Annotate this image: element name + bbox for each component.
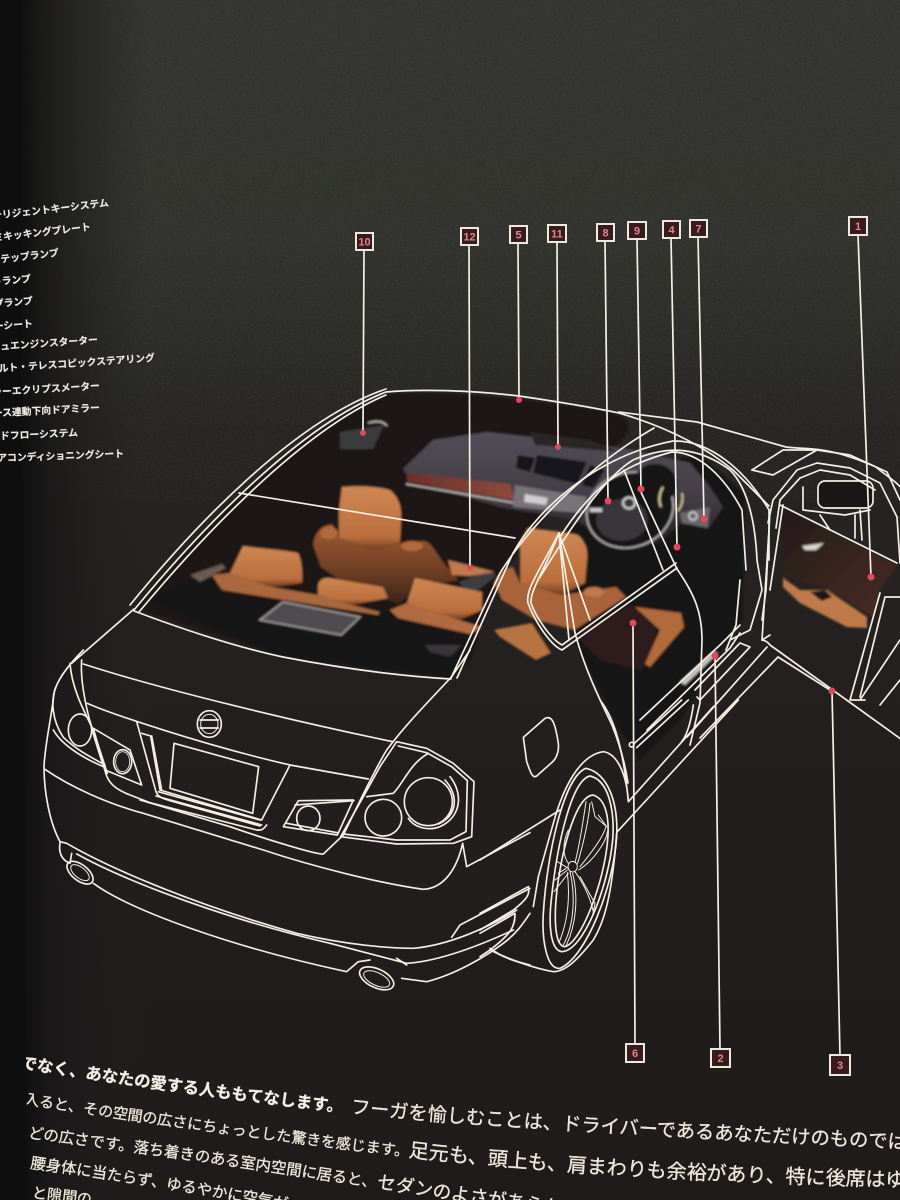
body copy: でなく、あなたの愛する人ももてなします。 フーガを愉しむことは、ドライバーであるあなただけのものでは: [26, 1057, 900, 1149]
body door dark area: [560, 455, 745, 760]
leader line 8: [604, 241, 612, 504]
lower body: [45, 769, 530, 889]
trunk lamp: [283, 800, 353, 835]
label 12: [461, 228, 478, 245]
door mirror outer: [803, 487, 870, 515]
label 10: [356, 233, 373, 250]
door handle: [802, 543, 824, 550]
label 11: 11: [551, 228, 563, 240]
label 3: 3: [837, 1060, 843, 1072]
leader line 1: [858, 235, 874, 580]
front right roof: [619, 412, 900, 492]
door panel: [780, 505, 897, 617]
front seat cushion: [494, 623, 551, 660]
leader line 2: [712, 652, 720, 1049]
door waist: [780, 505, 897, 563]
rear armrest centre: [318, 578, 388, 605]
steering wheel: [576, 460, 684, 560]
front headrest: [520, 528, 587, 595]
label 9: [628, 222, 646, 239]
front lower: [490, 833, 617, 972]
leader line 5: [516, 243, 522, 403]
rear headrest right: [407, 578, 482, 620]
rearview mirror: [340, 425, 384, 449]
centre shoulder belts: [459, 570, 496, 596]
sills: [617, 700, 738, 832]
A pillar door opening: [730, 530, 770, 640]
bumper: [60, 842, 517, 948]
instrument cluster: [633, 464, 677, 504]
left inner lamp: [93, 728, 142, 785]
leader line 6: [630, 620, 636, 1044]
car line drawing: roof and pillars: [72, 389, 900, 783]
door lower frame: [850, 593, 900, 700]
sill plate: [680, 652, 718, 685]
leader line 3: [828, 688, 840, 1056]
label 8: 8: [602, 228, 609, 240]
dashboard: [403, 432, 723, 548]
lid bottom: [105, 770, 267, 830]
door mirror glass: [818, 481, 873, 508]
rear glass dark area: [137, 393, 629, 678]
label 5: [510, 226, 527, 243]
roof line: [134, 390, 769, 610]
plate recess: [156, 792, 262, 825]
label 4: [663, 221, 680, 238]
quarter window: [528, 533, 677, 650]
far-side seat back: [313, 525, 459, 604]
C pillar into windshield arcs: [451, 428, 654, 678]
right tail lamp: [341, 742, 474, 844]
label 1: [849, 217, 867, 235]
front seat back: [494, 567, 626, 630]
front seat footwell dark red: [575, 605, 660, 670]
spokes: [554, 802, 607, 946]
body copy: 入ると、その空間の広さにちょっとした驚きを感じます。足元も、頭上も、肩まわりも余裕があり、特に後席はゆ: [26, 1092, 900, 1188]
label 4: 4: [668, 224, 675, 236]
car line drawing: rear end: [44, 650, 530, 995]
label 7: 7: [695, 224, 702, 236]
engine start button cluster: [680, 507, 710, 528]
shelf side: [190, 564, 226, 582]
wheel arch: [533, 700, 628, 907]
side sills: [640, 625, 740, 720]
navigation screen: [533, 455, 587, 484]
door armrest: [783, 578, 867, 628]
leader line 9: [637, 239, 644, 492]
label 2: 2: [717, 1053, 724, 1065]
rear window top line: [239, 493, 515, 538]
badge: [197, 711, 221, 737]
label 8: [597, 224, 614, 241]
leader line 7: [698, 237, 708, 522]
leader line 12: [467, 245, 473, 571]
label 3: [830, 1055, 850, 1075]
leader line 11: [555, 242, 561, 450]
rear headrest left: [230, 546, 302, 587]
label 6: 6: [632, 1048, 638, 1060]
label 10: 10: [358, 236, 371, 248]
label 11: [548, 225, 566, 242]
door sill curve: [762, 640, 900, 742]
b pillar line: [575, 633, 628, 783]
list of equipment names: [0, 197, 155, 465]
car line drawing: wheel and side: [480, 700, 738, 972]
label 7: [690, 220, 707, 237]
fuel filler door: [523, 718, 558, 777]
leader line 10: [360, 250, 366, 436]
rear window lower edge: [134, 611, 451, 679]
far-side headrest: [339, 486, 401, 550]
left outer lamp: [68, 714, 92, 746]
label 6: [626, 1044, 644, 1062]
left gutter shadow over text: [0, 900, 28, 1200]
wood trim: [407, 473, 515, 500]
console: [448, 560, 495, 576]
climate panel: [513, 485, 587, 513]
rear shelf darker area: [150, 575, 480, 678]
rear seat band: [212, 573, 380, 615]
front seat side: [635, 607, 684, 667]
c pillar: [140, 650, 470, 854]
label 2: [711, 1049, 730, 1067]
body left outline: [44, 650, 83, 842]
exhausts: [356, 962, 397, 995]
parcel shelf vent: [260, 602, 360, 635]
car interior photo parts: [137, 393, 897, 760]
label 5: 5: [515, 230, 522, 242]
door top frame: [752, 450, 900, 500]
label 12: 12: [463, 232, 476, 244]
label 1: 1: [855, 221, 861, 233]
label 9: 9: [634, 226, 640, 238]
leader line 4: [671, 238, 680, 550]
tyre: [543, 768, 617, 968]
